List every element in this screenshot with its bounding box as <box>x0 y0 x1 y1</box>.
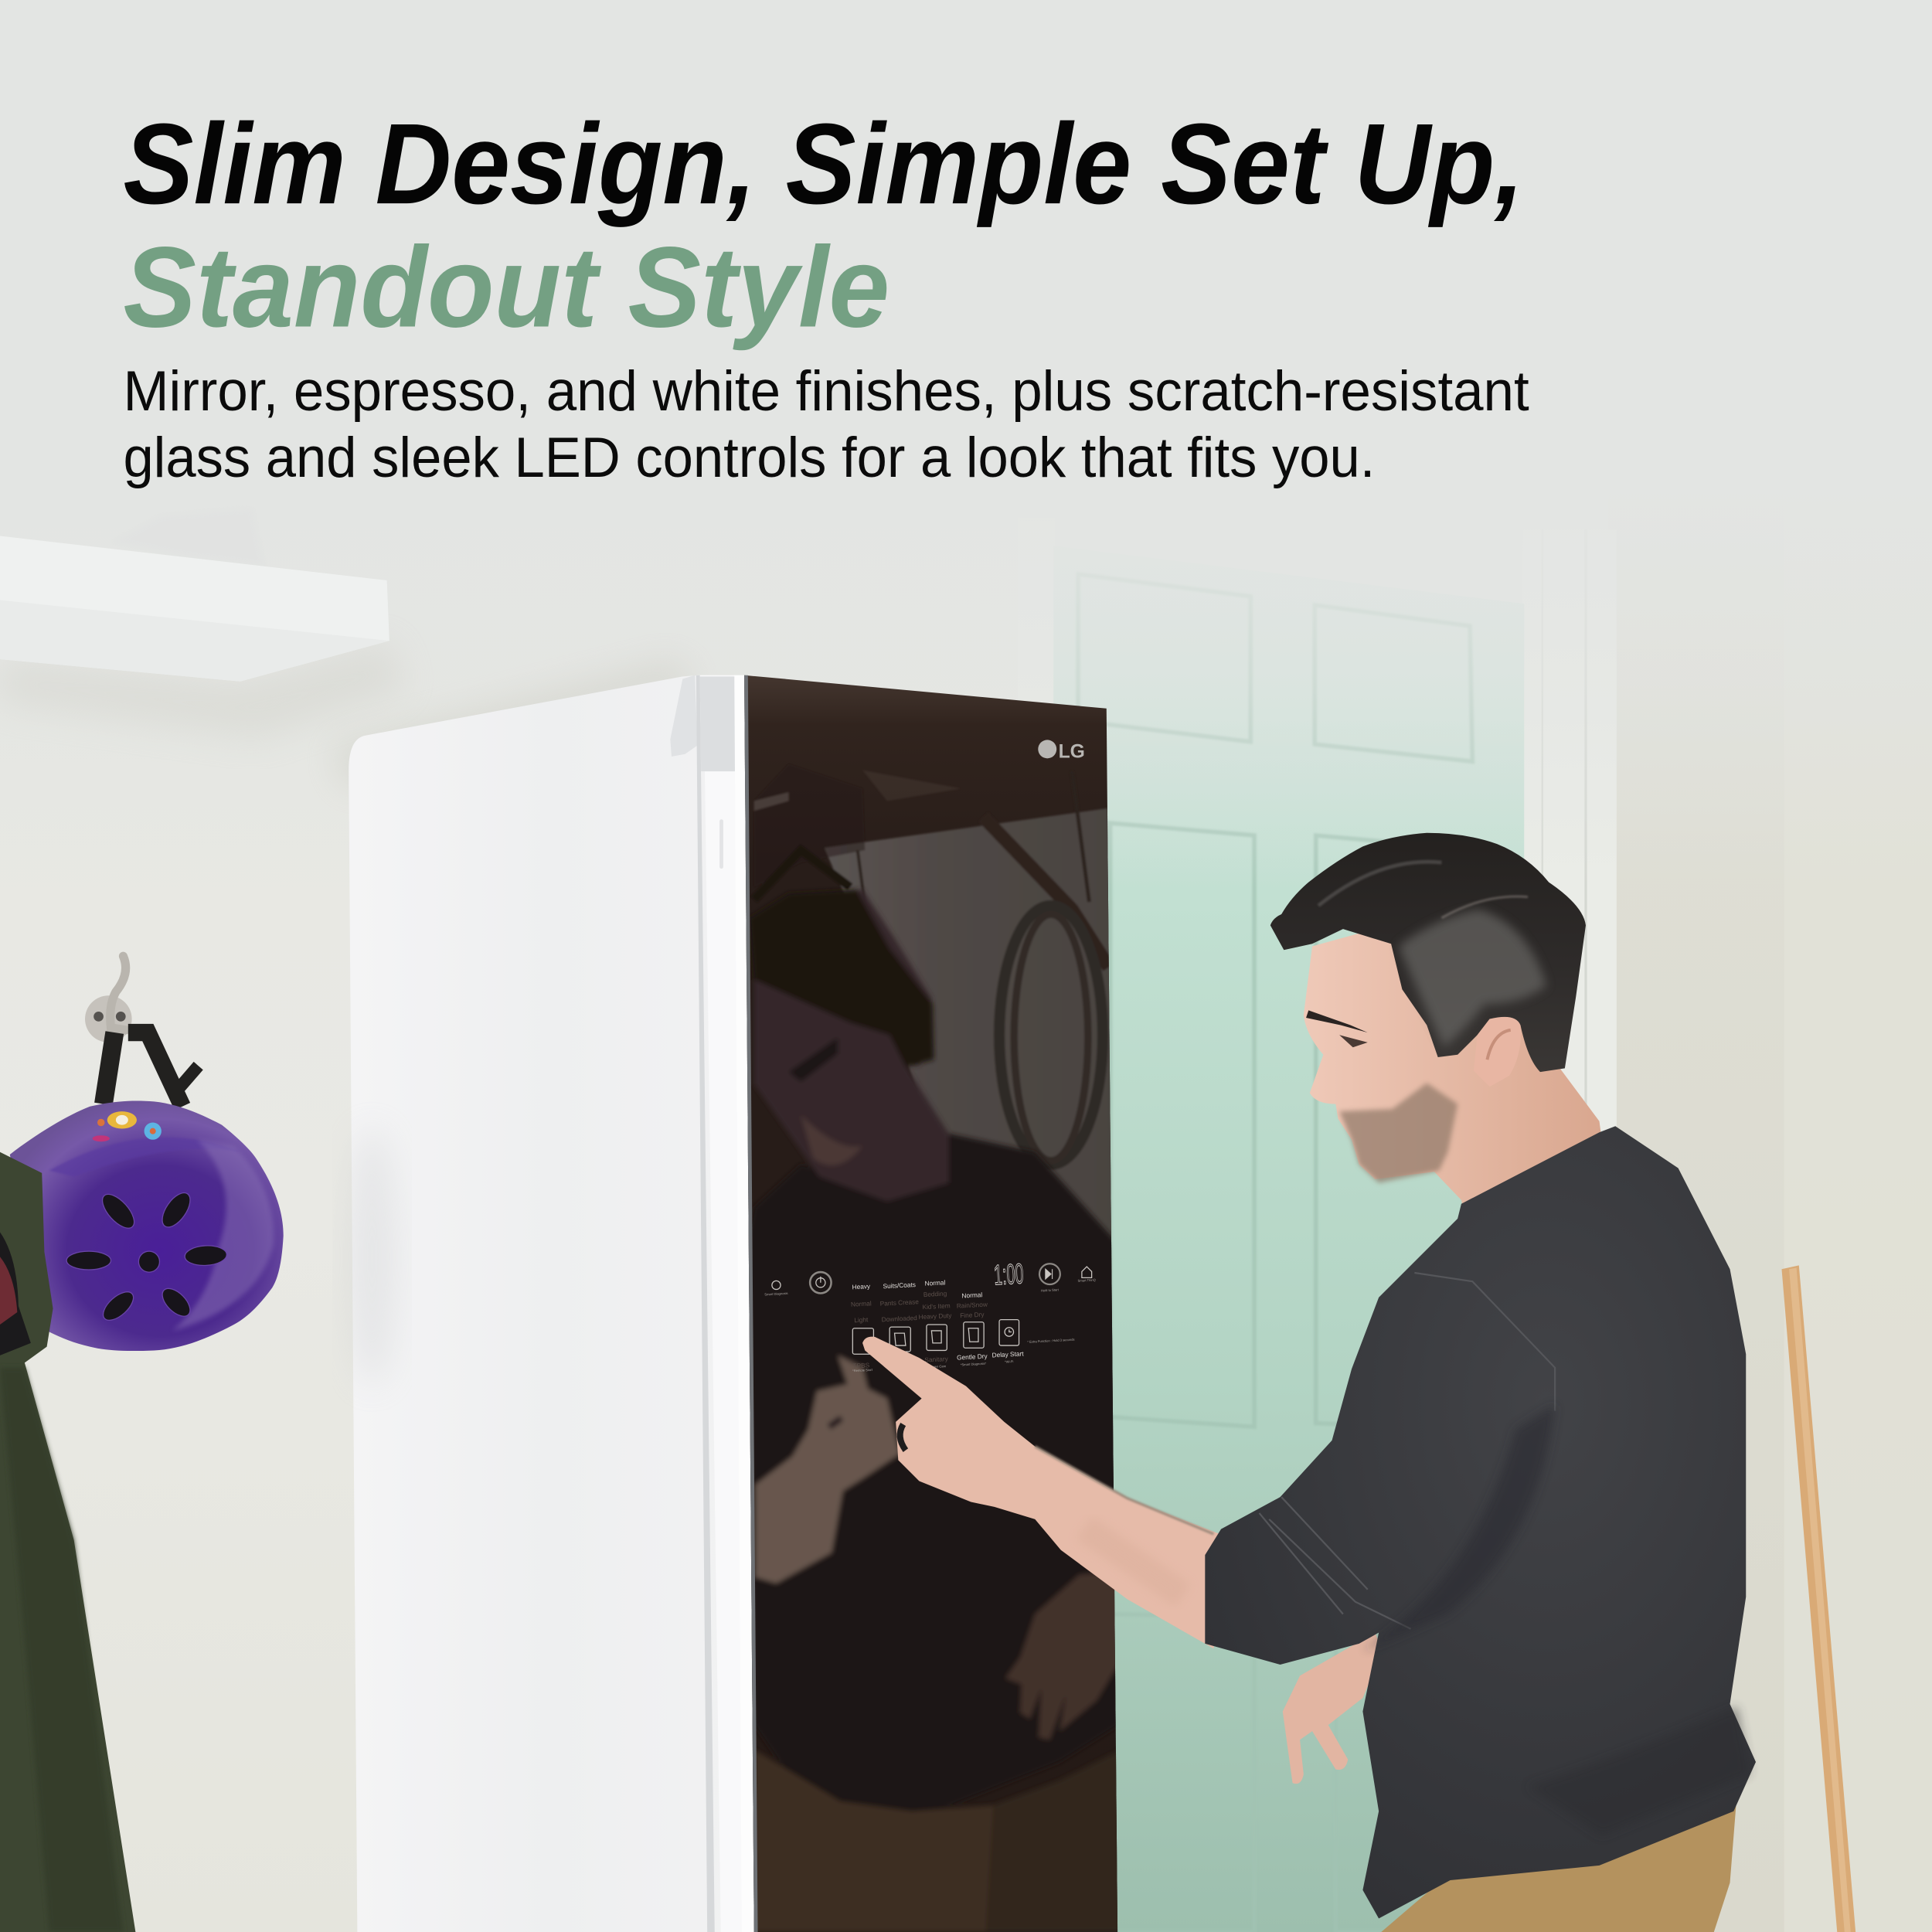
cabinet body <box>348 675 754 1932</box>
man <box>862 833 1756 1932</box>
wedding ring <box>900 1424 906 1451</box>
button captions: Gentle Dry <box>957 1352 988 1362</box>
cycle labels: Heavy Duty <box>918 1311 952 1321</box>
cycle buttons <box>852 1320 1019 1354</box>
cycle labels: Suits/Coats <box>883 1281 916 1290</box>
home icon <box>1077 1267 1097 1283</box>
door panels <box>1078 574 1491 1932</box>
button captions: Sanitary <box>924 1355 949 1364</box>
sweater seams <box>1259 1273 1555 1629</box>
shadow of cabinet on wall <box>332 659 696 788</box>
cycle labels: Normal <box>961 1291 983 1300</box>
cycle labels: Normal <box>851 1299 872 1308</box>
cycle labels: Fine Dry <box>960 1311 985 1319</box>
green jacket on hook <box>0 1152 135 1932</box>
top fade into title area <box>0 483 1932 889</box>
door edge trim <box>670 675 754 1932</box>
sweater <box>1205 1126 1756 1918</box>
ear <box>1474 1017 1521 1087</box>
cycle labels: Bedding <box>923 1289 947 1298</box>
smart diagnosis icon: Smart Diagnosis <box>764 1291 788 1296</box>
cycle labels: Downloaded <box>881 1314 917 1323</box>
pointing hand and forearm <box>862 1337 1219 1648</box>
coat hook and helmet straps <box>85 956 199 1107</box>
home icon: Smart ThinQ <box>1077 1278 1097 1283</box>
button captions: Delay Start <box>992 1349 1024 1359</box>
helmet vents <box>66 1188 227 1325</box>
play pause button <box>1039 1264 1060 1293</box>
title <box>123 100 1524 352</box>
button captions: TPBS <box>852 1361 870 1369</box>
grey hair highlights <box>1399 910 1546 1047</box>
reflected trousers <box>753 1750 994 1932</box>
button captions: Allergen Care <box>927 1364 947 1369</box>
smart diagnosis icon <box>764 1281 788 1296</box>
button captions: *Wi-Fi <box>1005 1359 1014 1364</box>
purple helmet <box>10 1101 284 1351</box>
mirrored glass door <box>744 675 1121 1932</box>
description: Mirror, espresso, and white finishes, plus scratch-resistant <box>123 359 1529 423</box>
beard <box>1339 1083 1458 1183</box>
reflected arm and hand <box>755 1355 900 1583</box>
LG logo: LG <box>1059 742 1085 763</box>
title: Slim Design, Simple Set Up, <box>123 100 1524 228</box>
button captions <box>852 1338 1075 1372</box>
play pause button: Hold to Start <box>1041 1287 1060 1293</box>
reflected man <box>749 889 1121 1932</box>
cycle labels <box>851 1278 988 1324</box>
trousers <box>1381 1805 1736 1932</box>
LG logo <box>1038 740 1085 763</box>
neck and face <box>1304 924 1602 1223</box>
cycle labels: Pants Crease <box>879 1298 919 1308</box>
wall shelf <box>0 508 406 740</box>
control panel <box>764 1257 1097 1372</box>
button captions: * Extra Function : Hold 3 seconds <box>1027 1338 1075 1344</box>
cycle labels: Heavy <box>852 1282 871 1291</box>
description <box>123 359 1529 489</box>
title accent line: Standout Style <box>123 224 889 352</box>
garage reflection <box>754 764 1119 1257</box>
green door with frame <box>1018 518 1617 1932</box>
broom handle <box>1781 1265 1855 1932</box>
time display: 1:00 <box>993 1257 1024 1291</box>
helmet stickers <box>93 1111 162 1141</box>
hair <box>1270 833 1586 1072</box>
cycle labels: Normal <box>924 1278 946 1287</box>
cycle labels: Kid's Item <box>922 1301 951 1311</box>
cycle labels: Light <box>854 1315 869 1324</box>
button captions: *Smart Diagnosis* <box>961 1362 987 1366</box>
lower hand <box>1283 1633 1383 1784</box>
cycle labels: Rain/Snow <box>957 1301 988 1310</box>
button captions: *Remote Start <box>852 1368 873 1372</box>
power button <box>810 1272 832 1293</box>
description: glass and sleek LED controls for a look that fits you. <box>123 426 1375 489</box>
